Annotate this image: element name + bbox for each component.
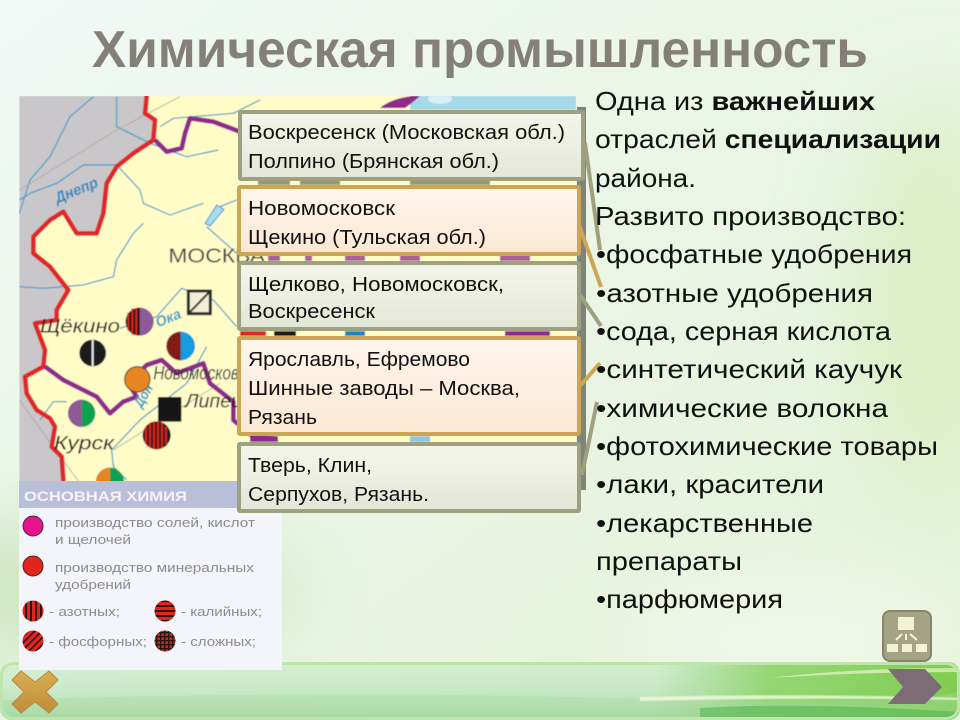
legend: complex: - сложных; xyxy=(181,634,256,649)
box: Shchelkovo: Щелково, Новомосковск, xyxy=(248,274,504,296)
icon: structure button xyxy=(883,611,931,661)
right text block: района. xyxy=(595,163,696,193)
legend: fertilizers: производство минеральных xyxy=(55,560,255,575)
icon: close cross button xyxy=(12,671,58,713)
grey shadow strip xyxy=(577,107,586,490)
lake and northern territory xyxy=(410,96,576,110)
map: Щёкино xyxy=(40,317,120,338)
legend: phosphorus xyxy=(22,630,147,652)
right text block: Развито производство: xyxy=(595,201,906,231)
right text block: •фосфатные удобрения xyxy=(596,239,912,269)
map fragments between boxes xyxy=(258,181,490,185)
box: Voskresensk: Полпино (Брянская обл.) xyxy=(248,151,499,173)
legend: salts: и щелочей xyxy=(55,532,131,547)
box: Yaroslavl xyxy=(239,338,579,434)
right text block: •сода, серная кислота xyxy=(596,316,892,346)
map: Новомосковск xyxy=(153,363,254,384)
right text block: Одна из важнейших xyxy=(595,86,876,116)
connector lines xyxy=(578,143,601,475)
striped red circle xyxy=(143,421,171,449)
legend: potassium xyxy=(154,600,262,622)
legend: nitrogen xyxy=(22,600,120,622)
striped and purple circle xyxy=(126,308,154,336)
right text block: препараты xyxy=(596,546,742,576)
legend: salts: производство солей, кислот xyxy=(55,515,255,530)
black square xyxy=(158,397,181,422)
right text block: •лаки, красители xyxy=(596,469,824,499)
orange and green circle xyxy=(96,467,125,481)
right text block: •химические волокна xyxy=(596,393,889,423)
right text block xyxy=(595,86,941,614)
bottom green band xyxy=(0,662,960,720)
map: Дон xyxy=(130,381,157,412)
box: Voskresensk: Воскресенск (Московская обл.) xyxy=(248,122,565,144)
box: Shchelkovo xyxy=(239,263,579,329)
legend: phosphorus: - фосфорных; xyxy=(49,634,147,649)
map: Липецк xyxy=(183,391,253,412)
box: Novomoskovsk xyxy=(239,187,579,254)
grey roads xyxy=(19,97,220,483)
right text block: •фотохимические товары xyxy=(596,431,938,461)
box: Tver: Серпухов, Рязань. xyxy=(248,484,429,506)
legend: potassium: - калийных; xyxy=(181,604,262,619)
black circle xyxy=(79,340,106,366)
box: Yaroslavl: Шинные заводы – Москва, xyxy=(248,378,520,400)
purple and green circle xyxy=(68,400,95,427)
legend: fertilizers: удобрений xyxy=(55,577,131,592)
red border xyxy=(25,97,155,480)
neighbouring territory in grey xyxy=(19,96,155,490)
map: Ока xyxy=(154,306,184,331)
box: Yaroslavl: Ярославль, Ефремово xyxy=(248,349,470,371)
orange circle xyxy=(125,367,150,392)
labels: МОСКВА xyxy=(168,246,266,268)
right text block: отраслей специализации xyxy=(595,124,941,154)
icon: next arrow button xyxy=(888,669,942,704)
legend heading: ОСНОВНАЯ ХИМИЯ xyxy=(24,488,187,504)
box: Shchelkovo: Воскресенск xyxy=(248,301,375,323)
map: Днепр xyxy=(51,174,101,208)
right text block: •лекарственные xyxy=(596,508,813,538)
map: Курск xyxy=(54,433,115,454)
legend: nitrogen: - азотных; xyxy=(49,604,120,619)
box: Voskresensk xyxy=(240,112,583,179)
title: Химическая промышленность xyxy=(92,21,868,79)
box: Tver: Тверь, Клин, xyxy=(248,455,372,477)
legend: complex xyxy=(154,630,256,652)
box: Tver xyxy=(239,444,579,511)
square symbol xyxy=(188,291,210,314)
right text block: •парфюмерия xyxy=(596,584,783,614)
map xyxy=(19,94,576,496)
legend xyxy=(19,481,282,670)
grid and blue circle xyxy=(166,332,195,360)
box: Novomoskovsk: Новомосковск xyxy=(248,198,395,220)
right text block: •синтетический каучук xyxy=(596,354,903,384)
legend: fertilizers xyxy=(23,556,255,592)
legend: salts xyxy=(23,515,255,547)
right text block: •азотные удобрения xyxy=(596,278,873,308)
purple border xyxy=(155,118,240,152)
rivers xyxy=(19,97,260,480)
box: Yaroslavl: Рязань xyxy=(248,407,317,429)
box: Novomoskovsk: Щекино (Тульская обл.) xyxy=(248,227,486,249)
